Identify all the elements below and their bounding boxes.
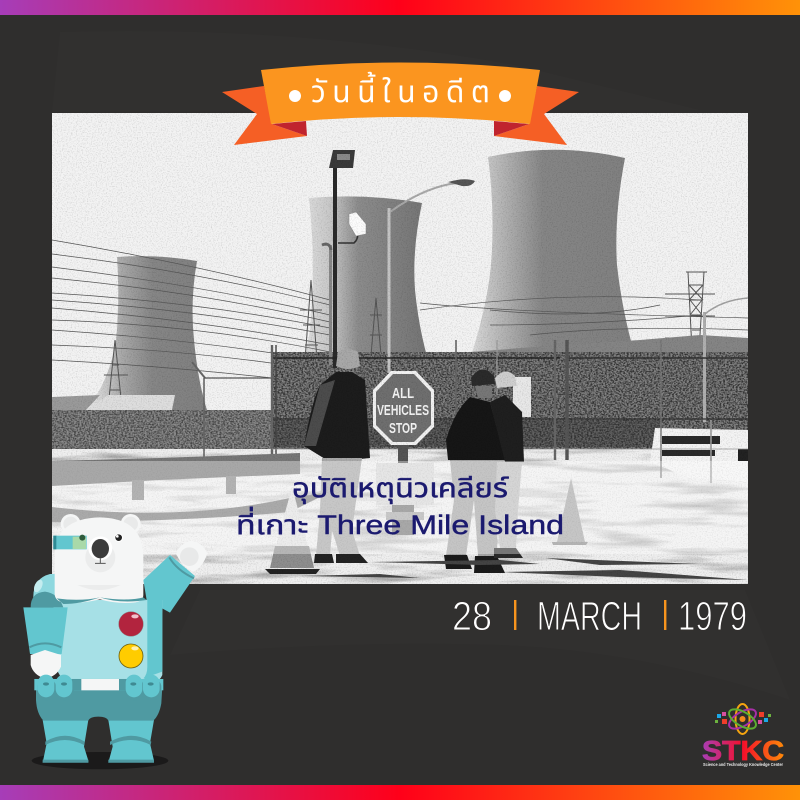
date line (452, 593, 747, 639)
cooling tower: right (472, 150, 631, 352)
ground shadows (300, 558, 748, 580)
date: day: 28 (452, 593, 492, 639)
ribbon text: วันนี้ในอดีต (311, 71, 490, 109)
mascot boots (43, 720, 154, 763)
ribbon banner (222, 62, 579, 145)
traffic cone: right (552, 478, 588, 545)
sky (52, 113, 748, 410)
ribbon tail: right (494, 86, 579, 145)
icon: polar bear robot mascot (23, 514, 207, 769)
title line 2: ที่เกาะ Three Mile Island (236, 506, 564, 540)
octagonal stop sign: ALL (392, 385, 414, 402)
lower notice sign and post (376, 440, 434, 535)
mascot collar (57, 597, 147, 604)
power lines (52, 240, 748, 385)
fence texture (272, 352, 748, 449)
tree line behind fence (52, 335, 748, 458)
translucent title strip (52, 461, 748, 554)
logo tagline: Science and Technology Knowledge Center (703, 762, 783, 767)
ribbon bullet left (289, 90, 301, 102)
title text (236, 473, 564, 540)
hill and white tower base (52, 395, 175, 410)
mascot pants (36, 682, 163, 721)
mascot side panel (143, 600, 162, 678)
person: worker with helmet (490, 371, 524, 558)
ribbon folds (272, 121, 529, 136)
mascot yellow button (119, 644, 143, 668)
person: left worker (304, 349, 370, 563)
mascot belt (34, 675, 163, 700)
octagonal stop sign (373, 371, 434, 445)
ribbon tail: left (222, 86, 307, 145)
pylons (104, 272, 715, 408)
top gradient bar (0, 0, 800, 15)
street lamp: curved light pole (388, 179, 475, 373)
guard rail (52, 453, 300, 500)
bridge wall (650, 428, 748, 482)
mascot visor (53, 535, 87, 549)
mascot left shoulder (31, 574, 63, 607)
road ground (52, 449, 271, 458)
photo: Three Mile Island checkpoint (52, 113, 748, 584)
date: month: MARCH (537, 593, 642, 639)
cooling tower: middle (306, 196, 426, 352)
right street lamp (703, 298, 748, 422)
person: officer with hat (444, 369, 505, 573)
mascot right arm (143, 541, 207, 614)
chain link fence (192, 340, 748, 483)
warning sign on fence (513, 377, 531, 417)
dark band behind fence (272, 420, 662, 447)
mascot left arm (23, 607, 68, 679)
background brush texture (52, 31, 790, 700)
photo grain (52, 113, 748, 584)
octagonal stop sign: VEHICLES (377, 402, 429, 419)
street lamp pole with camera (322, 150, 366, 368)
mascot red button (119, 612, 143, 636)
date: year: 1979 (678, 593, 747, 639)
logo wordmark: STKC (702, 735, 784, 766)
logo atom icon (715, 704, 771, 734)
ribbon bullet right (499, 90, 511, 102)
title line 1: อุบัติเหตุนิวเคลียร์ (292, 473, 510, 504)
tree texture left (52, 410, 271, 449)
mascot shadow (32, 752, 168, 769)
octagonal stop sign: STOP (389, 420, 417, 437)
traffic cone: left (265, 487, 320, 574)
mascot torso (53, 600, 162, 682)
ribbon centre (261, 62, 540, 124)
logo: STKC (702, 704, 784, 767)
bottom gradient bar (0, 785, 800, 800)
date separator (514, 600, 516, 630)
mascot head (55, 514, 143, 603)
cooling tower: left (86, 256, 207, 410)
date separator (664, 600, 666, 630)
